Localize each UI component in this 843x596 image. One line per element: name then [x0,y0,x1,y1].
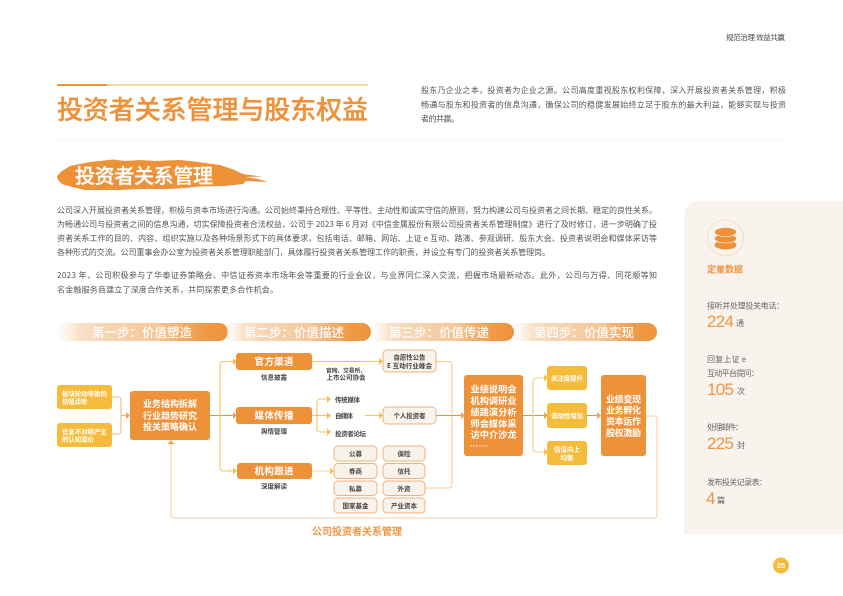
flow: channel 2 media: 媒体传播 [254,408,294,422]
flow: step four main box: 股权激励 [606,426,641,439]
flow: step three main box: 机构调研业 [470,393,516,407]
step banners: 第四步：价值实现 [534,322,634,341]
step banners [58,322,657,341]
body text: 资者关系工作的目的、内容、组织实施以及各种场景形式下的具体要求，包括电话、邮箱、网站、上证 e 互动、路演、参观调研、股东大会、投资者说明会和媒体采访等 [57,233,657,244]
flow: step one main box [130,391,210,440]
stat: emails [707,422,745,453]
title: 投资者关系管理与股东权益 [57,90,368,127]
flow: institution type grid [334,446,425,513]
flow: media labels [335,394,366,438]
flow: outcome yellow boxes [547,366,587,465]
flow: step one main box: 投关策略确认 [143,420,197,433]
flow: institution type grid: 公募 [349,448,362,458]
flow: institution type grid: 信托 [398,466,411,476]
stat: SSE e-interaction [707,354,759,399]
chart caption: 公司投资者关系管理 [312,523,402,538]
flow: institution type grid: 券商 [349,466,362,476]
flow: outcome yellow boxes: 估值向上 [554,444,580,454]
body text: 公司深入开展投资者关系管理，积极与资本市场进行沟通。公司始终秉持合规性、平等性、主动性和诚实守信的原则，努力构建公司与投资者之间长期、稳定的良性关系。 [57,205,657,216]
body text: 名金融服务商建立了深度合作关系，共同探索更多合作机会。 [57,284,278,296]
flow: media labels: 自媒体 [335,410,354,420]
stat: records: 篇 [717,495,725,506]
intro paragraph: 股东乃企业之本，投资者为企业之源。公司高度重视股东权利保障，深入开展投资者关系管理，积极 [421,85,786,96]
stat: emails: 处理邮件： [707,422,743,433]
body text [57,205,657,296]
icon: coin stack [708,220,744,256]
flow: channel 1 official [236,353,312,382]
flow: outcome yellow boxes: 关注度提升 [551,372,584,382]
stat: records: 发布投关记录表： [707,477,767,488]
flow: channel 1 official: 信息披露 [261,372,288,382]
flow: step four main box [601,375,646,456]
flow: media labels: 投资者论坛 [335,428,366,438]
stat: SSE e-interaction: 105 [707,380,734,399]
flow: step three main box [464,375,523,456]
step banners: 第一步：价值塑造 [92,322,192,341]
flow: step one main box: 业务结构拆解 [143,397,197,410]
intro paragraph: 畅通与股东和投资者的信息沟通，确保公司的稳健发展始终立足于股东的最大利益，能够实现与投资 [421,100,786,110]
flow: institution type grid: 国家基金 [342,500,369,510]
stat: calls: 接听并处理投关电话： [707,300,784,312]
flow: step three main box: 业绩说明会 [470,382,516,396]
stat: SSE e-interaction: 互动平台提问： [707,368,759,379]
flow: institution type grid: 外资 [398,483,411,493]
flow: institution type grid: 保险 [398,448,411,458]
panel: quantitative data [684,201,843,534]
stat: calls: 通 [736,318,744,329]
intro paragraph [421,85,786,124]
section heading brush: 投资者关系管理 [75,160,213,189]
flow: left trigger boxes: 板块轮动导致的 [62,388,108,398]
page number badge [773,558,789,574]
flow: disclosure box [383,350,436,372]
flow: step three main box: 访中介沙龙 [470,427,516,441]
flow: step four main box: 业绩变现 [606,392,641,406]
flow: outcome yellow boxes: 流动性增加 [551,410,583,420]
stat: SSE e-interaction: 回复上证 e [707,354,747,365]
flow: step four main box: 业务孵化 [606,404,641,416]
flow: individual investors box: 个人投资者 [394,410,426,420]
flow: step one main box: 行业趋势研究 [143,409,197,422]
flow: left trigger boxes: 估值洼地 [62,396,88,406]
flow: left trigger boxes [57,385,112,447]
flow: channel 3 institutions [237,463,312,490]
flow: left trigger boxes: 信息不对称产生 [62,426,108,436]
page header text: 规范治理 效益共赢 [726,32,786,43]
body text: 为畅通公司与投资者之间的信息沟通，切实保障投资者合法权益，公司于 2023 年 6 月对《中信金属股份有限公司投资者关系管理制度》进行了及时修订，进一步明确了投 [57,219,657,230]
flow: step four main box: 资本运作 [606,414,641,428]
stat: records: 4 [706,489,715,508]
flow: step three main box: ...... [470,440,487,450]
flow: institution type grid: 产业资本 [391,500,418,510]
flow: channel 3 institutions: 深度解读 [261,480,288,490]
flow: step three main box: 绩路演分析 [470,404,516,418]
stat: emails: 225 [707,434,734,453]
body text: 各种形式的交流。公司董事会办公室为投资者关系管理职能部门，具体履行投资者关系管理工作的职责，并设立有专门的投资者关系管理岗。 [57,247,550,258]
stat: calls: 224 [707,312,734,331]
title rule [57,84,368,86]
page number badge: 25 [777,561,785,570]
stat: records [706,477,767,508]
flow connectors [112,358,657,518]
stat: calls [707,300,784,331]
flow: disclosure box: E 互动行业峰会 [387,360,432,370]
stat: SSE e-interaction: 次 [737,386,745,397]
intro paragraph: 者的共赢。 [421,114,459,124]
flow: individual investors box [383,407,436,424]
body text: 2023 年，公司积极参与了华泰证券策略会、中信证券资本市场年会等重要的行业会议，与业界同仁深入交流，把握市场最新动态。此外，公司与万得、同花顺等知 [57,270,657,281]
flow: channel 2 media [236,407,312,436]
flow: official channel labels: 上市公司协会 [326,372,366,382]
step banners: 第三步：价值传递 [389,322,489,341]
section heading brush [57,160,268,190]
step banners: 第二步：价值描述 [244,322,344,341]
flow: official channel labels [326,366,366,382]
flow: institution type grid: 私募 [349,483,362,493]
flow: disclosure box: 自愿性公告 [394,352,426,362]
stat: emails: 封 [737,440,745,451]
flow: left trigger boxes: 的认知溢价 [62,434,94,444]
flow: media labels: 传统媒体 [335,394,360,404]
flow: channel 1 official: 官方渠道 [254,354,294,368]
flow: outcome yellow boxes: 均衡 [560,452,574,462]
flow: step three main box: 师会媒体采 [470,416,516,430]
flow: official channel labels: 官网、交易所、 [326,366,366,374]
panel heading: 定量数据 [707,262,743,276]
flow: channel 3 institutions: 机构跟进 [254,464,294,478]
flow: channel 2 media: 舆情管理 [261,426,288,436]
